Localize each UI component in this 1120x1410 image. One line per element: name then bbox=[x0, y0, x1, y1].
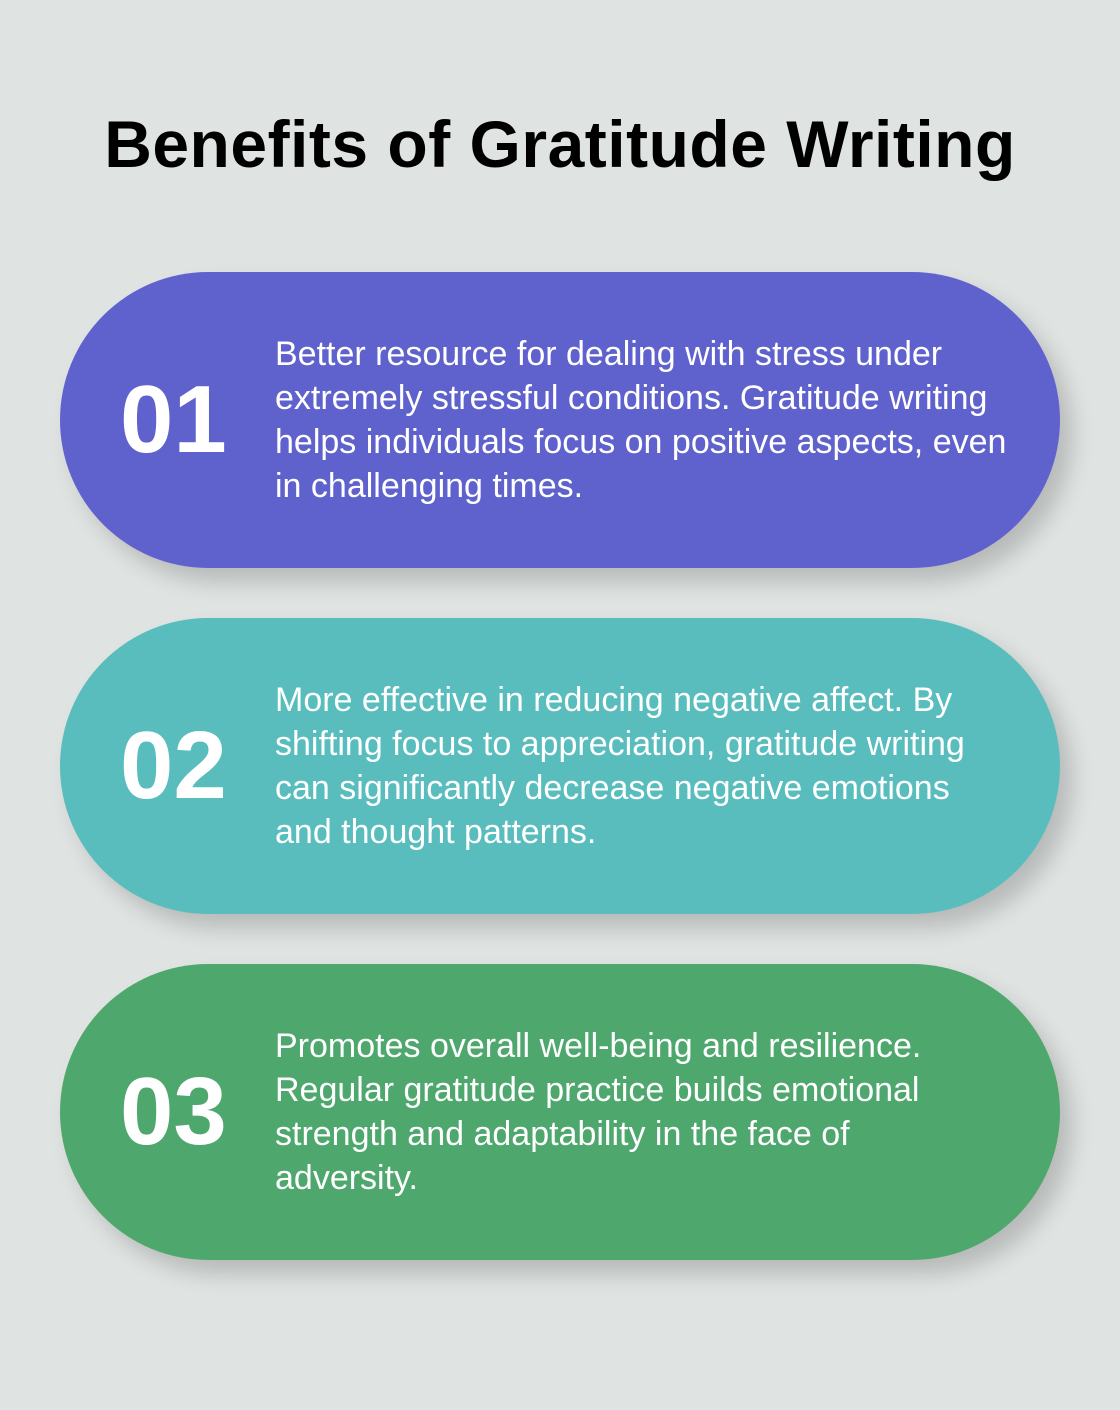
text 02: More effective in reducing negative affect. By bbox=[275, 681, 952, 719]
text 02: and thought patterns. bbox=[275, 813, 596, 851]
title: Benefits of Gratitude Writing bbox=[104, 107, 1016, 181]
text 01: in challenging times. bbox=[275, 467, 583, 505]
text 01: helps individuals focus on positive aspects, even bbox=[275, 423, 1006, 461]
text 03: strength and adaptability in the face of bbox=[275, 1115, 850, 1153]
text 02 bbox=[275, 681, 965, 851]
text 03: adversity. bbox=[275, 1159, 418, 1197]
text 03: Promotes overall well-being and resilience. bbox=[275, 1027, 921, 1065]
number 02: 02 bbox=[120, 712, 227, 819]
number 03: 03 bbox=[120, 1058, 227, 1165]
panel: benefit 01 bbox=[60, 272, 1060, 568]
text 03: Regular gratitude practice builds emotional bbox=[275, 1071, 919, 1109]
panel: benefit 03 bbox=[60, 964, 1060, 1260]
text 02: shifting focus to appreciation, gratitude writing bbox=[275, 725, 965, 763]
panel: benefit 02 bbox=[60, 618, 1060, 914]
number 01: 01 bbox=[120, 366, 227, 473]
text 01 bbox=[275, 335, 1006, 505]
text 01: Better resource for dealing with stress under bbox=[275, 335, 942, 373]
text 03 bbox=[275, 1027, 921, 1197]
text 02: can significantly decrease negative emotions bbox=[275, 769, 950, 807]
text 01: extremely stressful conditions. Gratitude writing bbox=[275, 379, 987, 417]
